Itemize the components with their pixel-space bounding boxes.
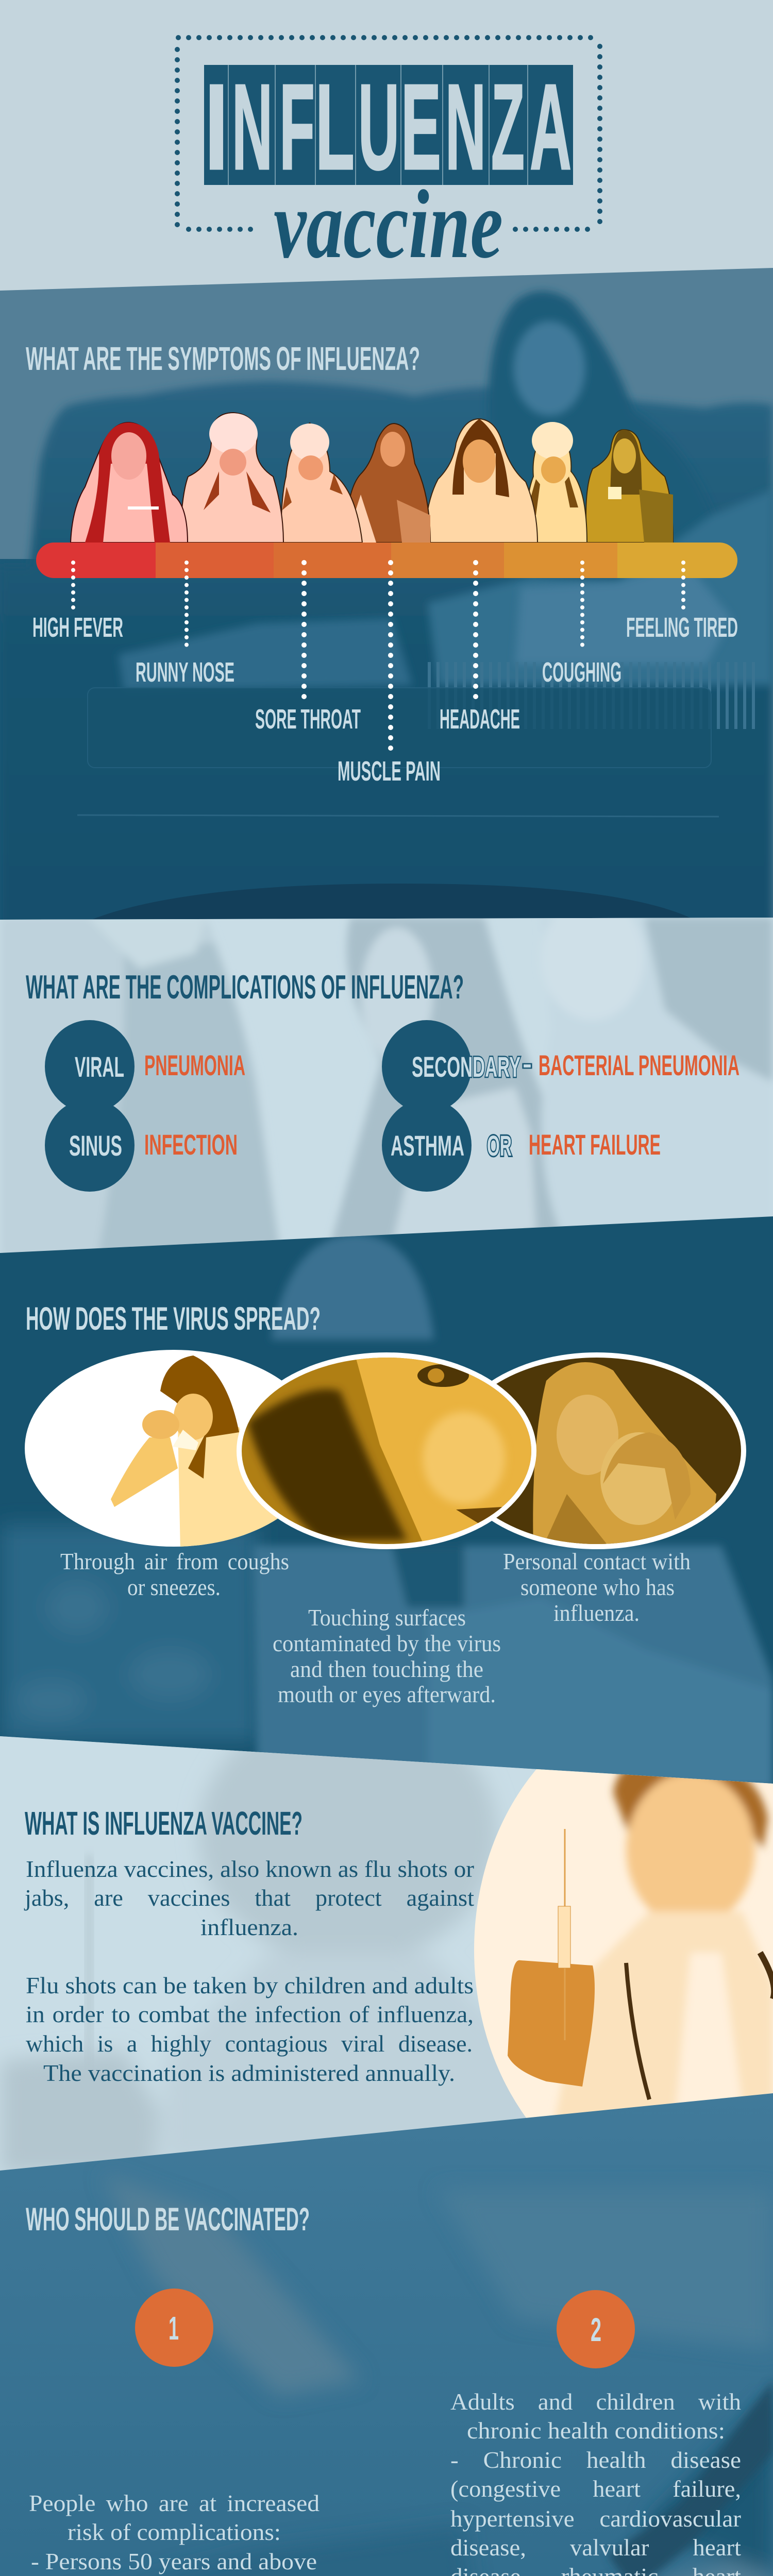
- complication ovals: [45, 1020, 472, 1192]
- complication labels: ASTHMA: [391, 1129, 464, 1162]
- caption: surfaces: [273, 1604, 501, 1707]
- vaccine description: Flu shots can be taken by children and adults: [26, 1972, 474, 1998]
- row of flu patients: [71, 413, 673, 543]
- panel: complications: [0, 896, 773, 1257]
- text: increased risk: - Persons 50 years and above: [31, 2548, 317, 2574]
- spread background photo: [0, 1211, 773, 1788]
- panel: header background: [0, 0, 773, 309]
- spread captions: [60, 1548, 691, 1707]
- title banner cells: [204, 65, 573, 185]
- vaccination background photo: [0, 2087, 773, 2576]
- caption: air: or sneezes.: [127, 1574, 221, 1600]
- complication labels: [69, 1049, 740, 1162]
- complication labels: PNEUMONIA: [144, 1049, 245, 1081]
- caption: surfaces: and then touching the: [290, 1656, 483, 1682]
- vaccine description: jabs, are vaccines that protect against: [24, 1885, 474, 1911]
- patient 5: [424, 419, 537, 543]
- vaccine description: in order to combat the infection of influenza,: [26, 2001, 474, 2027]
- patient 3: [281, 423, 362, 543]
- patient 7: [586, 430, 673, 543]
- caption: surfaces: mouth or eyes afterward.: [278, 1681, 496, 1707]
- complication labels: INFECTION: [144, 1128, 238, 1161]
- title: INFLUENZA: N: [232, 59, 273, 195]
- vaccine description: influenza.: [200, 1914, 298, 1940]
- caption: contact: [503, 1548, 691, 1626]
- heading: who should be vaccinated: WHO SHOULD BE VACCINATED?: [26, 2201, 310, 2238]
- caption: contact: someone who has: [520, 1574, 675, 1600]
- patient 1: [71, 422, 188, 543]
- dotted connector lines: [73, 563, 683, 750]
- title: vaccine: vaccine: [274, 171, 503, 279]
- text: chronic conditions: - Chronic health disease: [450, 2447, 741, 2473]
- symptom labels: COUGHING: [542, 657, 621, 688]
- symptom labels: [32, 612, 738, 787]
- symptoms background photo: [0, 258, 773, 927]
- text: increased risk: [29, 2490, 326, 2576]
- symptom labels: HEADACHE: [440, 704, 520, 735]
- title: INFLUENZA: I: [205, 59, 228, 195]
- title: INFLUENZA: N: [445, 59, 486, 195]
- symptom labels: HIGH FEVER: [32, 612, 123, 643]
- caption: air: Through air from coughs: [60, 1548, 289, 1574]
- heading: what is influenza vaccine: WHAT IS INFLUENZA VACCINE?: [25, 1805, 303, 1842]
- title: INFLUENZA: F: [279, 59, 315, 195]
- patient 2: [180, 413, 283, 543]
- text: chronic conditions: chronic health conditions:: [467, 2417, 725, 2444]
- photo: doctor holding syringe: [464, 1736, 773, 2179]
- symptom labels: SORE THROAT: [255, 704, 361, 735]
- heading: spread: HOW DOES THE VIRUS SPREAD?: [26, 1301, 321, 1337]
- title block: [177, 38, 600, 279]
- text: chronic conditions: disease, valvular heart: [450, 2534, 741, 2561]
- caption: surfaces: Touching surfaces: [308, 1604, 466, 1631]
- text: increased risk: People who are at increased: [29, 2490, 320, 2516]
- complication labels: SECONDARY: [412, 1050, 520, 1083]
- photo: close-up of face: [237, 1350, 752, 1556]
- text: chronic conditions: (congestive heart failure,: [450, 2476, 741, 2502]
- panel: how the virus spreads: [0, 1211, 773, 1788]
- caption: air: [60, 1548, 289, 1600]
- photo: woman sneezing: [25, 1350, 323, 1551]
- complication labels: VIRAL: [75, 1050, 124, 1083]
- number badge 1: 1: [169, 2310, 179, 2347]
- text: chronic conditions: Adults and children with: [450, 2388, 741, 2415]
- panel: who should be vaccinated: [0, 2087, 773, 2576]
- symptom timeline bar: [36, 543, 737, 578]
- title: INFLUENZA: [205, 59, 572, 195]
- faded doctor background: [0, 1705, 773, 2174]
- text: chronic conditions: hypertensive cardiovascular: [450, 2505, 741, 2532]
- dotted frame: [177, 38, 600, 229]
- complication labels: HEART FAILURE: [529, 1128, 661, 1161]
- symptom labels: MUSCLE PAIN: [338, 756, 441, 787]
- vaccine description: [24, 1856, 474, 2086]
- heading: symptoms: WHAT ARE THE SYMPTOMS OF INFLUENZA?: [26, 340, 420, 377]
- vaccine description: The vaccination is administered annually.: [43, 2060, 455, 2086]
- vaccine description: Influenza vaccines, also known as flu shots or: [26, 1856, 474, 1882]
- complication labels: -: [523, 1049, 532, 1078]
- caption: contact: influenza.: [553, 1600, 640, 1626]
- title: INFLUENZA: L: [315, 59, 355, 195]
- photo: two children hugging: [443, 1350, 752, 1556]
- vaccine description: which is a highly contagious viral disease.: [26, 2030, 473, 2057]
- complication labels: SINUS: [69, 1129, 122, 1162]
- symptom labels: RUNNY NOSE: [136, 657, 234, 688]
- title block: A: [530, 59, 572, 195]
- text: increased risk: risk of complications:: [68, 2519, 281, 2545]
- patient 4: [345, 423, 430, 543]
- number badge 2: [557, 2290, 635, 2368]
- title: INFLUENZA: E: [401, 59, 441, 195]
- panel: what is influenza vaccine: [0, 1705, 773, 2179]
- number badge 1: [135, 2289, 213, 2367]
- number badge 2: 2: [591, 2311, 601, 2348]
- panel: symptoms: [0, 258, 773, 927]
- caption: contact: Personal contact with: [503, 1548, 691, 1574]
- complications background photo: [0, 896, 773, 1257]
- caption: surfaces: contaminated by the virus: [273, 1630, 501, 1656]
- title: INFLUENZA: U: [358, 59, 399, 195]
- complication labels: OR: [487, 1129, 512, 1162]
- patient 6: [525, 422, 587, 543]
- title: INFLUENZA: Z: [491, 59, 525, 195]
- text: chronic conditions: [450, 2388, 741, 2576]
